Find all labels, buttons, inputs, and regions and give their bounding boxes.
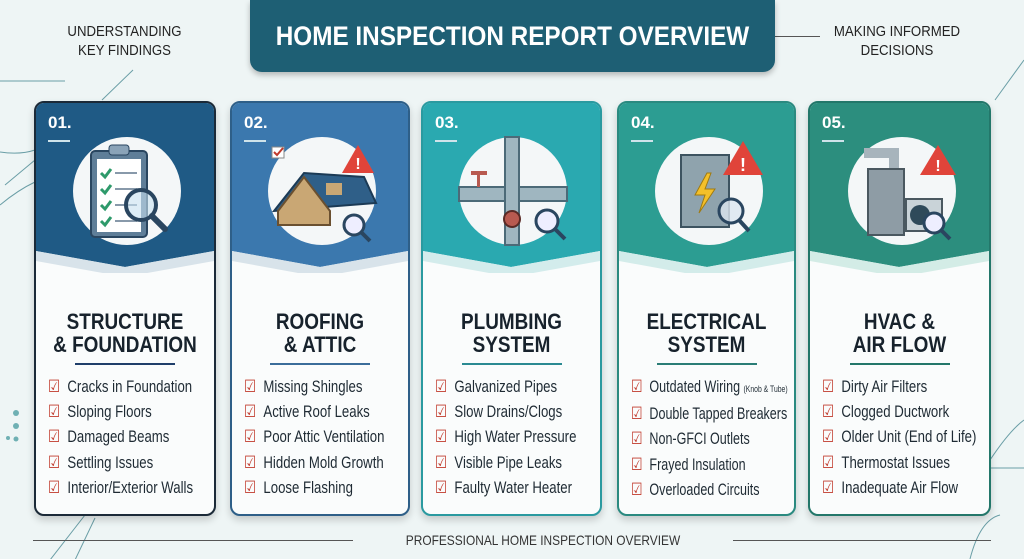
card 4: electrical system: Frayed Insulation — [649, 456, 746, 474]
card 5: hvac & air flow: HVAC & — [864, 309, 935, 334]
card 2: roofing & attic: Missing Shingles — [263, 378, 362, 396]
card 4: electrical system: ELECTRICAL — [647, 309, 766, 334]
card 2: roofing & attic: ROOFING — [276, 309, 364, 334]
icon: furnace — [848, 137, 956, 245]
card 4: electrical system: Non-GFCI Outlets — [649, 430, 750, 448]
title banner — [250, 0, 775, 72]
card 3: plumbing system: Slow Drains/Clogs — [454, 403, 562, 421]
card 1: structure & foundation — [34, 101, 216, 516]
title: STRUCTURE — [67, 309, 183, 334]
footer: PROFESSIONAL HOME INSPECTION OVERVIEW — [406, 532, 680, 548]
icon: furnace: ! — [935, 158, 941, 175]
icon: electrical panel: ! — [740, 155, 746, 175]
card 3: plumbing system: 03. — [435, 113, 459, 132]
card 2: roofing & attic: & ATTIC — [284, 332, 356, 357]
card 4: electrical system: SYSTEM — [668, 332, 745, 357]
card 3: plumbing system: Visible Pipe Leaks — [454, 454, 562, 472]
card 1: structure & foundation: 01. — [48, 113, 72, 132]
card 3: plumbing system: SYSTEM — [473, 332, 550, 357]
card 2: roofing & attic: 02. — [244, 113, 268, 132]
title: & FOUNDATION — [53, 332, 197, 357]
card 2: roofing & attic: Loose Flashing — [263, 479, 353, 497]
side text: making informed decisions: MAKING INFORMED — [834, 23, 960, 40]
title banner: HOME INSPECTION REPORT OVERVIEW — [276, 21, 749, 51]
icon: roof — [268, 137, 378, 245]
card 5: hvac & air flow: Inadequate Air Flow — [841, 479, 958, 497]
checklist: Cracks in Foundation — [67, 378, 192, 396]
card 3: plumbing system — [421, 101, 602, 516]
card 5: hvac & air flow: Clogged Ductwork — [841, 403, 949, 421]
side text: making informed decisions — [834, 23, 960, 59]
side text: making informed decisions: DECISIONS — [861, 42, 933, 59]
checklist: Interior/Exterior Walls — [67, 479, 193, 497]
checklist: Damaged Beams — [67, 428, 169, 446]
icon: pipes — [458, 136, 568, 246]
card 2: roofing & attic — [230, 101, 410, 516]
card 3: plumbing system: Faulty Water Heater — [454, 479, 572, 497]
card 3: plumbing system: Galvanized Pipes — [454, 378, 557, 396]
card 5: hvac & air flow: Dirty Air Filters — [841, 378, 927, 396]
card 4: electrical system: Overloaded Circuits — [649, 481, 760, 499]
checklist — [49, 378, 193, 497]
icon: roof: ! — [355, 156, 361, 173]
card 3: plumbing system: PLUMBING — [461, 309, 562, 334]
checklist: Sloping Floors — [67, 403, 152, 421]
checklist: Settling Issues — [67, 454, 153, 472]
icon: clipboard — [73, 137, 181, 245]
card 4: electrical system: Outdated Wiring (Knob & Tube) — [649, 378, 788, 396]
card 2: roofing & attic: Poor Attic Ventilation — [263, 428, 384, 446]
side text: understanding key findings — [67, 23, 182, 59]
icon: electrical panel — [655, 137, 763, 245]
card 3: plumbing system: High Water Pressure — [454, 428, 576, 446]
card 5: hvac & air flow — [808, 101, 991, 516]
card 2: roofing & attic: Active Roof Leaks — [263, 403, 370, 421]
side text: understanding key findings: UNDERSTANDING — [67, 23, 182, 40]
card 4: electrical system: Double Tapped Breakers — [649, 405, 787, 423]
card 2: roofing & attic: Hidden Mold Growth — [263, 454, 384, 472]
card 5: hvac & air flow: Older Unit (End of Life) — [841, 428, 976, 446]
card 5: hvac & air flow: AIR FLOW — [853, 332, 946, 357]
side text: understanding key findings: KEY FINDINGS — [78, 42, 171, 59]
card 4: electrical system: 04. — [631, 113, 655, 132]
card 5: hvac & air flow: Thermostat Issues — [841, 454, 950, 472]
card 5: hvac & air flow: 05. — [822, 113, 846, 132]
title — [53, 309, 197, 357]
card 4: electrical system — [617, 101, 796, 516]
